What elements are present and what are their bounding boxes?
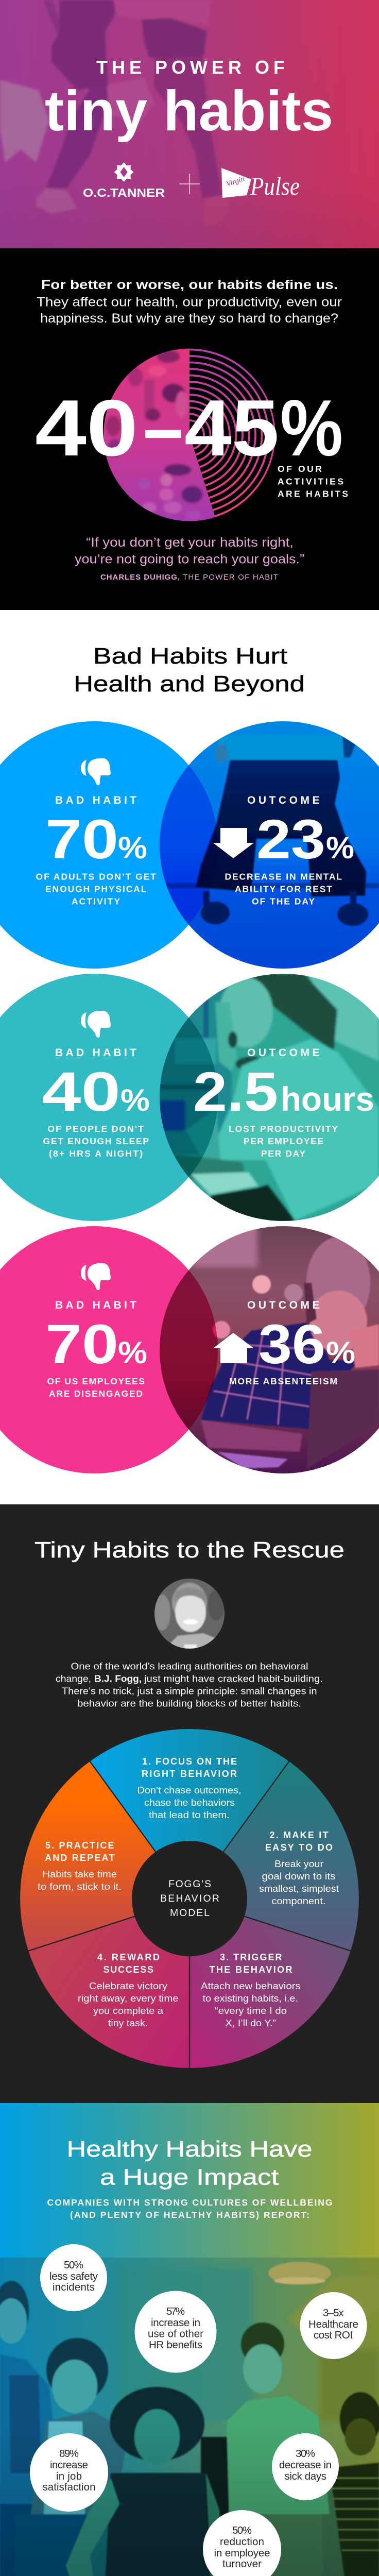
step 3 text [201, 1952, 301, 2028]
stat: 2.5 hours: hours [281, 1080, 374, 1118]
statistic caption [278, 464, 348, 499]
label: outcome: OUTCOME [247, 794, 319, 806]
logo: O.C. Tanner [83, 162, 165, 199]
step 5 text [38, 1840, 122, 1892]
outcome description [225, 872, 342, 907]
step 2 text: EASY TO DO [265, 1842, 333, 1853]
quote: you’re not going to reach your goals.” [75, 552, 304, 567]
quote: “If you don’t get your habits right, [86, 535, 294, 550]
stat bubble: sick days: decrease in [279, 2459, 332, 2471]
step 1 text: chase the behaviors [144, 1798, 235, 1808]
quote: THE POWER OF HABIT [183, 573, 278, 582]
stat description [36, 872, 156, 907]
section: tiny habits [0, 1504, 379, 2103]
stat description: OF PEOPLE DON’T [47, 1124, 144, 1134]
stat bubble: HR benefits: use of other [148, 2328, 203, 2340]
stat: 70 percent: 70 [45, 1313, 118, 1375]
photo wedge: crowd [103, 348, 215, 521]
step 4 text [78, 1952, 178, 2028]
title kicker: THE POWER OF [96, 57, 285, 78]
intro paragraph: B.J. Fogg, [94, 1673, 142, 1684]
plus sign [179, 174, 200, 194]
right man [340, 2392, 379, 2446]
section: healthy habits [0, 2103, 379, 2576]
wheel centre: FOGG’S [168, 1878, 211, 1890]
concentric rings wedge [190, 348, 275, 517]
icon: thumbs down [81, 1263, 111, 1290]
step 1 text: 1. FOCUS ON THE [142, 1756, 237, 1767]
step 4 text: 4. REWARD [97, 1952, 160, 1962]
step 4 text: tiny task. [108, 2018, 148, 2028]
logo: Virgin Pulse [221, 168, 300, 200]
intro paragraph: just might have cracked habit-building. [144, 1673, 323, 1684]
circle: bad habit [0, 974, 218, 1221]
step 2 text [259, 1830, 339, 1906]
stat: 70 percent: 70 [45, 808, 118, 870]
chart: behavior model wheel [20, 1728, 359, 2069]
label: outcome: OUTCOME [247, 1299, 319, 1311]
stat bubble: HR benefits: 57% [166, 2306, 185, 2317]
big statistic: 45 [184, 383, 279, 472]
stat bubble: job satisfaction: 89% [59, 2448, 79, 2460]
wheel centre: MODEL [170, 1907, 210, 1919]
stat bubble: job satisfaction [30, 2433, 108, 2512]
step 2 text: smallest, simplest [259, 1884, 339, 1894]
panel: row 1 physical activity [0, 721, 379, 969]
photo circle: tired man at laptop [160, 1226, 379, 1473]
stat description: OF ADULTS DON’T GET [36, 872, 156, 882]
label: bad habit: BAD HABIT [55, 1047, 136, 1059]
stat bubble: job satisfaction: in job [56, 2470, 82, 2482]
intro paragraph: change, [56, 1673, 91, 1684]
section: hero and habits definition [0, 0, 379, 610]
heading: Healthy Habits Have [67, 2137, 312, 2162]
wheel centre [132, 1841, 247, 1956]
panel: tiny habits to the rescue [0, 1504, 379, 2103]
photo: runners silhouettes [0, 0, 232, 227]
logo: Virgin Pulse: Virgin [225, 175, 246, 189]
stat description: ENOUGH PHYSICAL [45, 884, 147, 894]
statistic caption: ARE HABITS [278, 488, 348, 499]
step 5 text: 5. PRACTICE [45, 1840, 114, 1851]
icon: up arrow [213, 1333, 254, 1363]
intro paragraph [56, 1661, 323, 1708]
stat description: (8+ HRS A NIGHT) [49, 1148, 143, 1159]
portrait: B.J. Fogg [154, 1579, 225, 1651]
sector 3 [190, 1899, 351, 2069]
circle: bad habit [0, 1226, 218, 1473]
step 2 text: 2. MAKE IT [270, 1830, 329, 1840]
intro text: They affect our health, our productivity, even our [37, 295, 342, 309]
stat bubble: HR benefits: increase in [151, 2317, 200, 2329]
heading [67, 2137, 312, 2190]
step 3 text: Attach new behaviors [201, 1981, 301, 1991]
step 3 text: X, I’ll do Y.” [226, 2018, 276, 2028]
step 3 text: to existing habits, i.e. [203, 1993, 298, 2004]
stat description: OF US EMPLOYEES [47, 1376, 145, 1386]
stat: 70 percent: % [118, 831, 147, 865]
big statistic: – [143, 383, 183, 472]
stat bubble: safety incidents [40, 2244, 107, 2311]
icon: down arrow [213, 828, 254, 858]
stat bubble: job satisfaction: satisfaction [42, 2481, 96, 2493]
heading: bad habits [74, 643, 305, 697]
photo: smiling coworkers [0, 2258, 379, 2576]
outcome description: MORE ABSENTEEISM [229, 1376, 337, 1386]
step 5 text: Habits take time [42, 1869, 117, 1879]
section: bad habits [0, 643, 379, 1473]
panel: row 2 sleep [0, 974, 379, 1222]
stat description: ACTIVITY [72, 896, 120, 907]
icon: thumbs down [81, 1011, 111, 1038]
stat bubble: healthcare ROI: 3–5x [323, 2307, 344, 2319]
circle: bad habit [0, 721, 218, 969]
step 1 text [137, 1756, 241, 1820]
step 1 text: that lead to them. [149, 1810, 230, 1820]
outcome description: PER DAY [261, 1148, 305, 1159]
intro text: happiness. But why are they so hard to change? [40, 311, 338, 326]
stat bubble: employee turnover: reduction [220, 2536, 264, 2548]
stat description [47, 1376, 145, 1399]
logo: Virgin Pulse: Pulse [250, 172, 300, 200]
stat bubble: employee turnover: turnover [222, 2558, 262, 2570]
panel: hero banner [0, 0, 379, 248]
stat: 40 percent: % [120, 1083, 150, 1117]
intro text [37, 278, 342, 326]
panel: habits definition [0, 248, 379, 610]
outcome description: DECREASE IN MENTAL [225, 872, 342, 882]
stat: 23 percent: 23 [256, 808, 325, 870]
label: bad habit: BAD HABIT [55, 794, 136, 806]
big statistic: 40 [35, 383, 138, 472]
photo circle: seated woman [160, 721, 379, 969]
intro paragraph: There’s no trick, just a simple principle: small changes in [62, 1686, 317, 1696]
big statistic: % [280, 383, 343, 472]
heading: Tiny Habits to the Rescue [35, 1537, 344, 1563]
subheading [47, 2197, 333, 2220]
step 4 text: Celebrate victory [89, 1981, 167, 1991]
stat: 36 percent: % [326, 1335, 355, 1370]
stat bubble: healthcare ROI [300, 2292, 367, 2359]
heading: a Huge Impact [100, 2165, 279, 2190]
sector 1 [90, 1728, 289, 1899]
step 4 text: you complete a [93, 2006, 164, 2016]
stat bubble: safety incidents: 50% [64, 2259, 83, 2271]
outcome description: PER EMPLOYEE [244, 1136, 323, 1146]
step 3 text: “every time I do [215, 2006, 287, 2016]
step 1 text: RIGHT BEHAVIOR [142, 1769, 237, 1779]
intro paragraph: behavior are the building blocks of better habits. [77, 1698, 301, 1708]
intro text: For better or worse, our habits define us. [41, 278, 338, 292]
stat bubble: safety incidents: less safety [49, 2270, 98, 2282]
subheading: (AND PLENTY OF HEALTHY HABITS) REPORT: [70, 2210, 309, 2220]
step 3 text: 3. TRIGGER [220, 1952, 282, 1962]
stat: 40 percent: 40 [42, 1060, 120, 1123]
step 2 text: component. [272, 1896, 325, 1906]
photo circle: yawning woman [160, 974, 379, 1222]
label: bad habit: BAD HABIT [55, 1299, 136, 1311]
right woman [240, 2321, 285, 2358]
woman with plaid [46, 2338, 108, 2402]
intro paragraph: One of the world’s leading authorities on behavioral [71, 1661, 308, 1671]
stat: 23 percent: % [326, 831, 354, 865]
outcome description: ABILITY FOR REST [235, 884, 332, 894]
outcome description: LOST PRODUCTIVITY [229, 1124, 338, 1134]
step 5 text: to form, stick to it. [38, 1882, 122, 1892]
outcome description [229, 1124, 338, 1159]
quote [75, 535, 304, 582]
subheading: COMPANIES WITH STRONG CULTURES OF WELLBEING [47, 2197, 333, 2208]
label: outcome: OUTCOME [247, 1047, 319, 1059]
quote: CHARLES DUHIGG, [100, 573, 180, 582]
stat description: GET ENOUGH SLEEP [43, 1136, 149, 1146]
step 4 text: right away, every time [78, 1993, 178, 2004]
title: tiny habits [45, 79, 333, 143]
step 4 text: SUCCESS [103, 1964, 153, 1975]
panel: row 3 engagement [0, 1226, 379, 1473]
stat bubble: HR benefits: HR benefits [149, 2339, 202, 2351]
stat: 70 percent: % [118, 1335, 147, 1370]
stat description: ARE DISENGAGED [49, 1388, 143, 1399]
sector 5 [20, 1761, 190, 1951]
stat bubble: healthcare ROI: cost ROI [314, 2329, 353, 2341]
stat bubble: sick days [272, 2433, 339, 2500]
stat bubble: employee turnover: in employee [214, 2547, 270, 2559]
wheel centre: BEHAVIOR [160, 1893, 219, 1904]
centre woman [201, 2437, 232, 2576]
outcome description: OF THE DAY [252, 896, 315, 907]
sector 2 [190, 1761, 359, 1951]
sector 4 [28, 1899, 190, 2069]
stat description [43, 1124, 149, 1159]
step 1 text: Don’t chase outcomes, [137, 1785, 241, 1795]
stat: 36 percent: 36 [259, 1313, 325, 1375]
stat: 2.5 hours: 2.5 [193, 1060, 278, 1123]
stat bubble: HR benefits [135, 2291, 216, 2373]
stat bubble: sick days: sick days [284, 2470, 326, 2482]
icon: thumbs down [81, 758, 111, 785]
heading: bad habits: Health and Beyond [74, 671, 305, 697]
stat bubble: employee turnover [203, 2510, 281, 2576]
step 5 text: AND REPEAT [45, 1853, 114, 1863]
left man [0, 2281, 29, 2341]
stat bubble: safety incidents: incidents [53, 2281, 95, 2293]
heading: bad habits: Bad Habits Hurt [93, 643, 287, 669]
logo: O.C. Tanner: O.C.TANNER [83, 186, 165, 199]
stat bubble: healthcare ROI: Healthcare [308, 2318, 358, 2330]
statistic caption: OF OUR [278, 464, 322, 474]
stat bubble: sick days: 30% [296, 2448, 315, 2460]
step 3 text: THE BEHAVIOR [209, 1964, 292, 1975]
stat bubble: employee turnover: 50% [232, 2524, 252, 2536]
panel: healthy habits impact [0, 2103, 379, 2576]
step 2 text: goal down to its [262, 1871, 336, 1882]
step 2 text: Break your [274, 1859, 323, 1869]
statistic caption: ACTIVITIES [278, 476, 343, 486]
stat bubble: job satisfaction: increase [50, 2459, 88, 2471]
